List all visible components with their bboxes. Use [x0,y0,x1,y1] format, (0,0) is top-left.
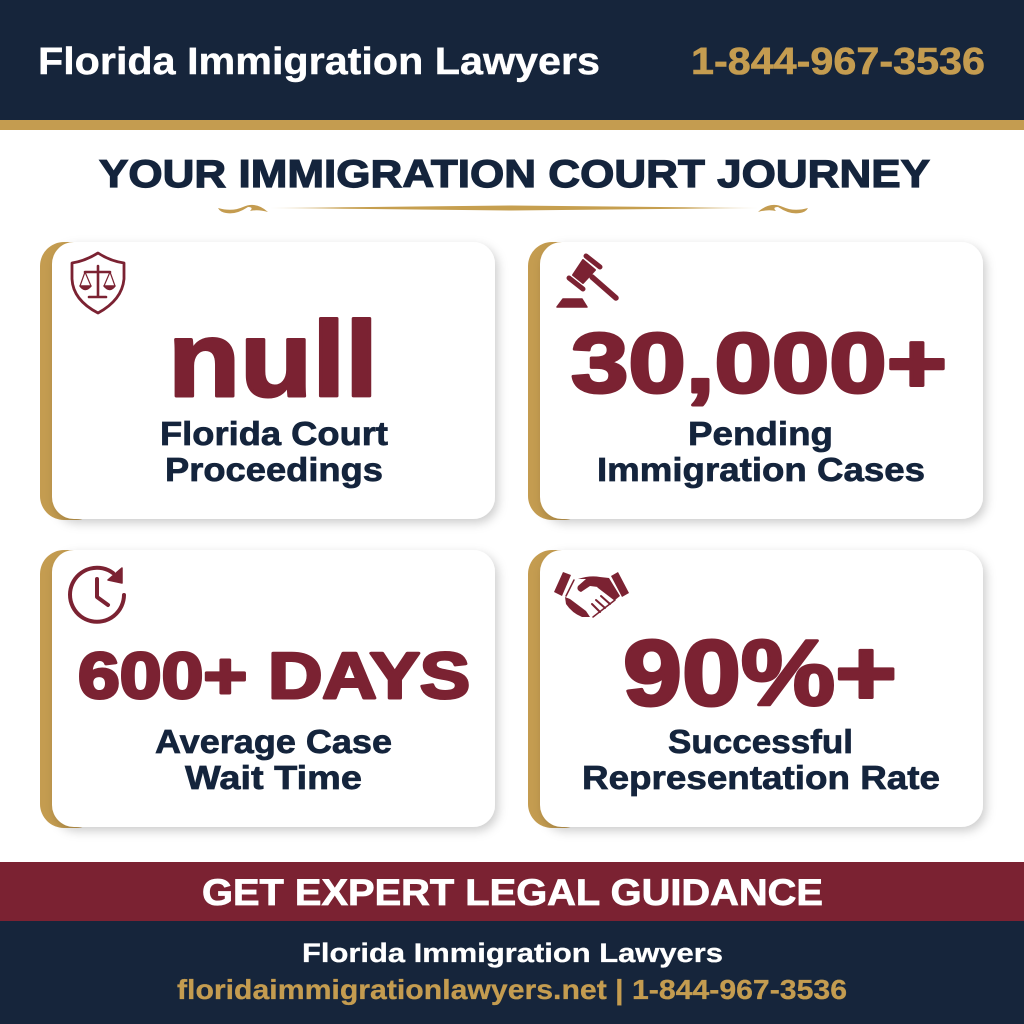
title: YOUR IMMIGRATION COURT JOURNEY [99,153,930,196]
icon: clock with arrow [70,568,124,622]
icon: shield with scales [72,253,124,313]
footer [0,921,1024,1024]
label: Average Case Wait Time [155,723,392,796]
panel: pending immigration cases [528,242,983,520]
big number: 30,000+: 30,000+ [571,316,947,410]
big number: null: null [168,299,378,419]
label: Successful Representation Rate: Representation Rate [582,759,940,796]
title ornament divider [218,205,808,213]
panel: average case wait time [40,550,495,828]
label: Average Case Wait Time: Wait Time [185,759,362,796]
header bar [0,0,1024,130]
big number: 90%+: 90%+ [623,621,897,725]
label: Florida Court Proceedings [160,415,388,488]
banner text: GET EXPERT LEGAL GUIDANCE [202,872,823,913]
label: Florida Court Proceedings: Proceedings [165,451,383,488]
label: Average Case Wait Time: Average Case [155,723,392,760]
label: Pending Immigration Cases: Immigration Cases [597,451,925,488]
big number: 600+ DAYS: 600+ DAYS [78,639,470,712]
label: Pending Immigration Cases [597,415,925,488]
footer website and phone: floridaimmigrationlawyers.net | 1-844-967-3536 [177,974,847,1005]
label: Pending Immigration Cases: Pending [688,415,833,452]
header phone number: 1-844-967-3536 [691,41,985,83]
label: Successful Representation Rate [582,723,940,796]
header firm name: Florida Immigration Lawyers [38,41,600,83]
icon: handshake [554,572,629,617]
label: Successful Representation Rate: Successful [668,723,853,760]
panel: successful representation rate [528,550,983,828]
icon: gavel [557,256,616,307]
footer firm name: Florida Immigration Lawyers [302,938,723,968]
panel: Florida court proceedings [40,242,495,520]
call to action banner [0,862,1024,921]
label: Florida Court Proceedings: Florida Court [160,415,388,452]
